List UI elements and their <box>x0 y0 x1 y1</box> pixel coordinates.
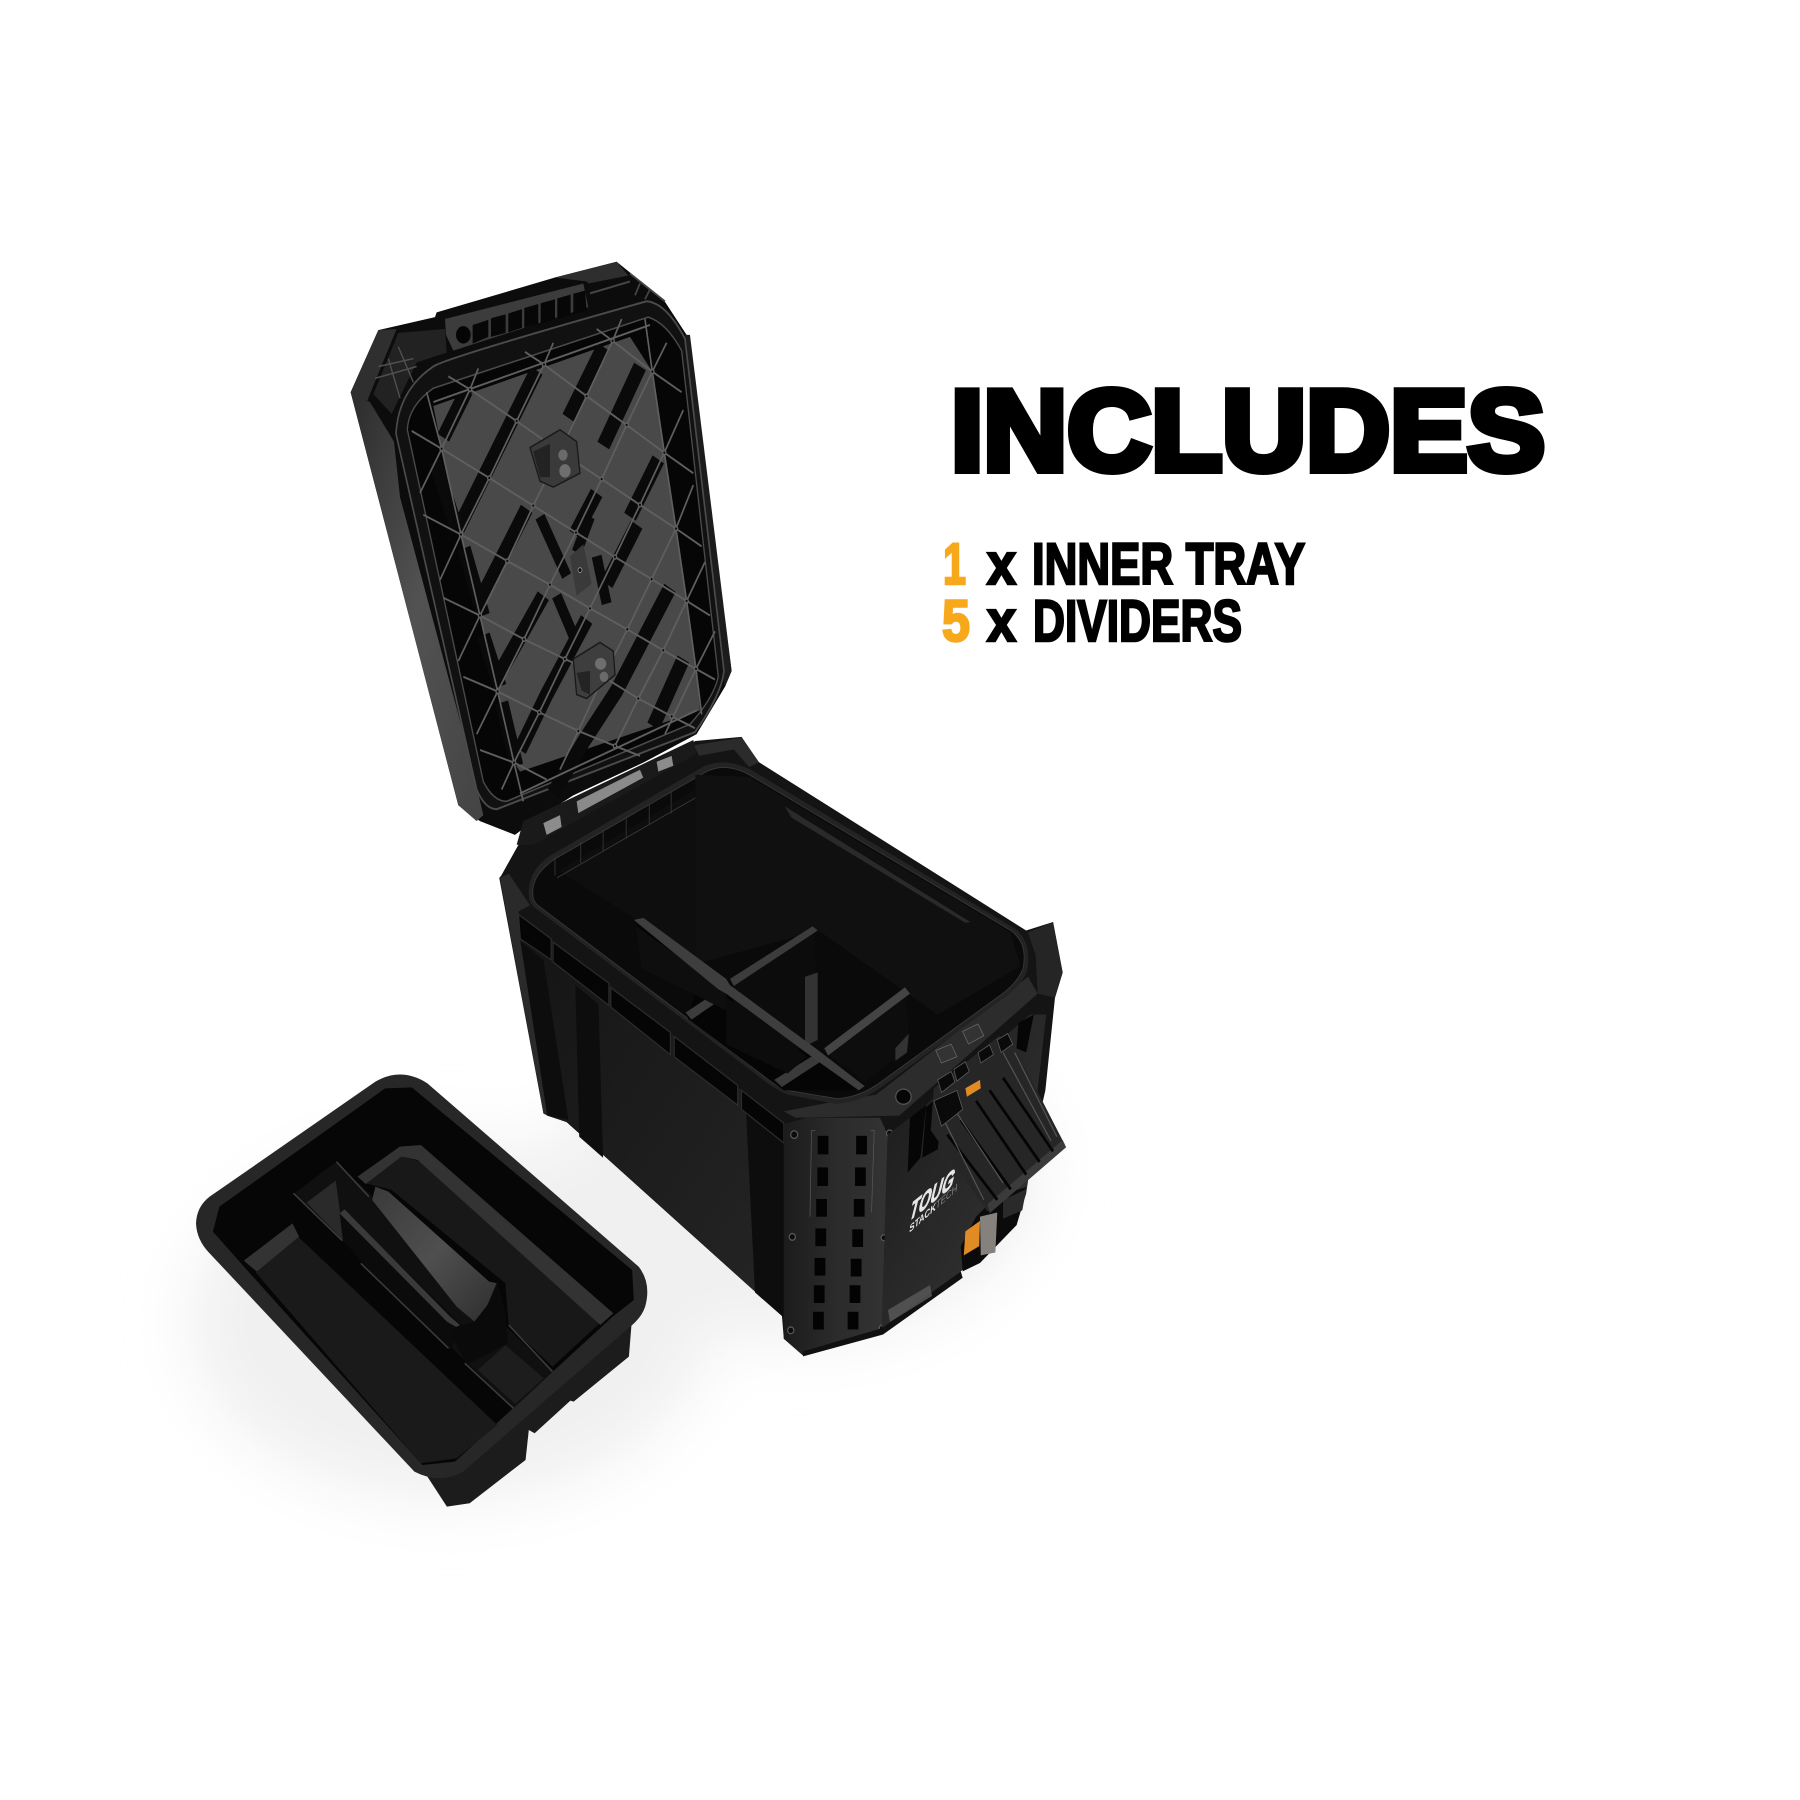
bottom edge chamfer <box>803 1271 963 1356</box>
latch ribs <box>947 1078 1053 1200</box>
tray ledge left <box>244 1223 299 1272</box>
product photo: open storage box <box>196 262 1066 1507</box>
tray floor left <box>256 1236 497 1463</box>
small compartment lower <box>478 1345 544 1404</box>
rim <box>529 763 1028 1104</box>
wall ledge strip <box>785 806 970 923</box>
long divider <box>634 918 865 1090</box>
top right corner ribs <box>590 274 665 301</box>
flange cells <box>473 291 587 344</box>
seal ring <box>396 301 724 809</box>
floor shadows <box>190 1000 1040 1500</box>
list of included items <box>942 532 1305 654</box>
tray floor right <box>366 1157 600 1367</box>
screws <box>788 1130 893 1334</box>
logo on box: STACKTECH <box>909 1181 958 1236</box>
center channel <box>294 1162 553 1408</box>
box spec label <box>888 1285 932 1322</box>
ledge squares <box>936 1024 984 1063</box>
line 2: dividers: DIVIDERS <box>1033 589 1242 654</box>
lid silhouette <box>351 262 732 835</box>
tray ledge right <box>358 1145 613 1325</box>
small compartment upper <box>306 1181 343 1240</box>
hanging latch <box>931 1034 1066 1213</box>
long side face <box>518 912 784 1318</box>
dark diagonal ribs <box>435 347 683 793</box>
tray fins <box>294 1162 553 1408</box>
handle front wall <box>340 1213 463 1350</box>
long face rib cells <box>518 914 784 1143</box>
box silhouette <box>499 737 1063 1356</box>
orange latch slot <box>961 1187 1026 1271</box>
line 1: inner tray <box>943 532 1305 597</box>
top ledge <box>784 977 1038 1118</box>
handle end block <box>450 1282 508 1365</box>
line 2: dividers: x <box>987 589 1016 654</box>
right corner post <box>1028 922 1063 998</box>
lid bracket upper <box>530 430 580 487</box>
lid <box>351 262 732 845</box>
lid center pin <box>570 544 592 596</box>
line 1: inner tray: x <box>987 532 1016 597</box>
lid bracket lower <box>573 642 615 699</box>
logo on box: TOUG <box>906 1161 958 1229</box>
handle edge highlight <box>340 1209 460 1327</box>
short divider 1 <box>686 926 818 1057</box>
lid side wall right <box>685 335 732 687</box>
inner panel floor <box>433 337 700 772</box>
box body and interior <box>499 737 1066 1356</box>
lattice grid <box>412 319 715 801</box>
right end face <box>882 1015 1046 1328</box>
box interior <box>533 767 1024 1099</box>
left corner post <box>500 874 567 1122</box>
vented corner panel <box>784 1118 893 1356</box>
hinge <box>517 740 697 845</box>
lid outer side wall <box>351 392 483 821</box>
line 1: inner tray: INNER TRAY <box>1032 532 1305 597</box>
lattice nodes <box>442 341 696 763</box>
removed inner tray <box>196 1075 647 1507</box>
right face dark slots <box>908 1015 1034 1172</box>
interior back wall <box>695 775 1020 1015</box>
interior rib cells <box>555 792 695 878</box>
tray rim <box>196 1075 647 1478</box>
handle top <box>372 1187 497 1322</box>
vent holes <box>813 1136 867 1329</box>
line 1: inner tray: 1 <box>943 532 966 597</box>
short divider 2 <box>774 987 910 1087</box>
floor and lower compartments <box>634 922 859 1090</box>
tray skirt <box>427 1317 632 1507</box>
top flange <box>445 262 628 351</box>
inner panel base <box>407 317 718 801</box>
heading: includes: INCLUDES <box>951 368 1545 495</box>
top left corner <box>351 329 447 414</box>
line 2: dividers <box>942 589 1242 654</box>
long face darker panel strips <box>520 941 784 1318</box>
line 2: dividers: 5 <box>942 589 970 654</box>
latch clips <box>934 1034 1013 1126</box>
top rear lip <box>693 738 759 767</box>
interior left wall <box>553 789 695 968</box>
tray cavity <box>213 1087 634 1465</box>
ledge hole <box>896 1089 911 1104</box>
